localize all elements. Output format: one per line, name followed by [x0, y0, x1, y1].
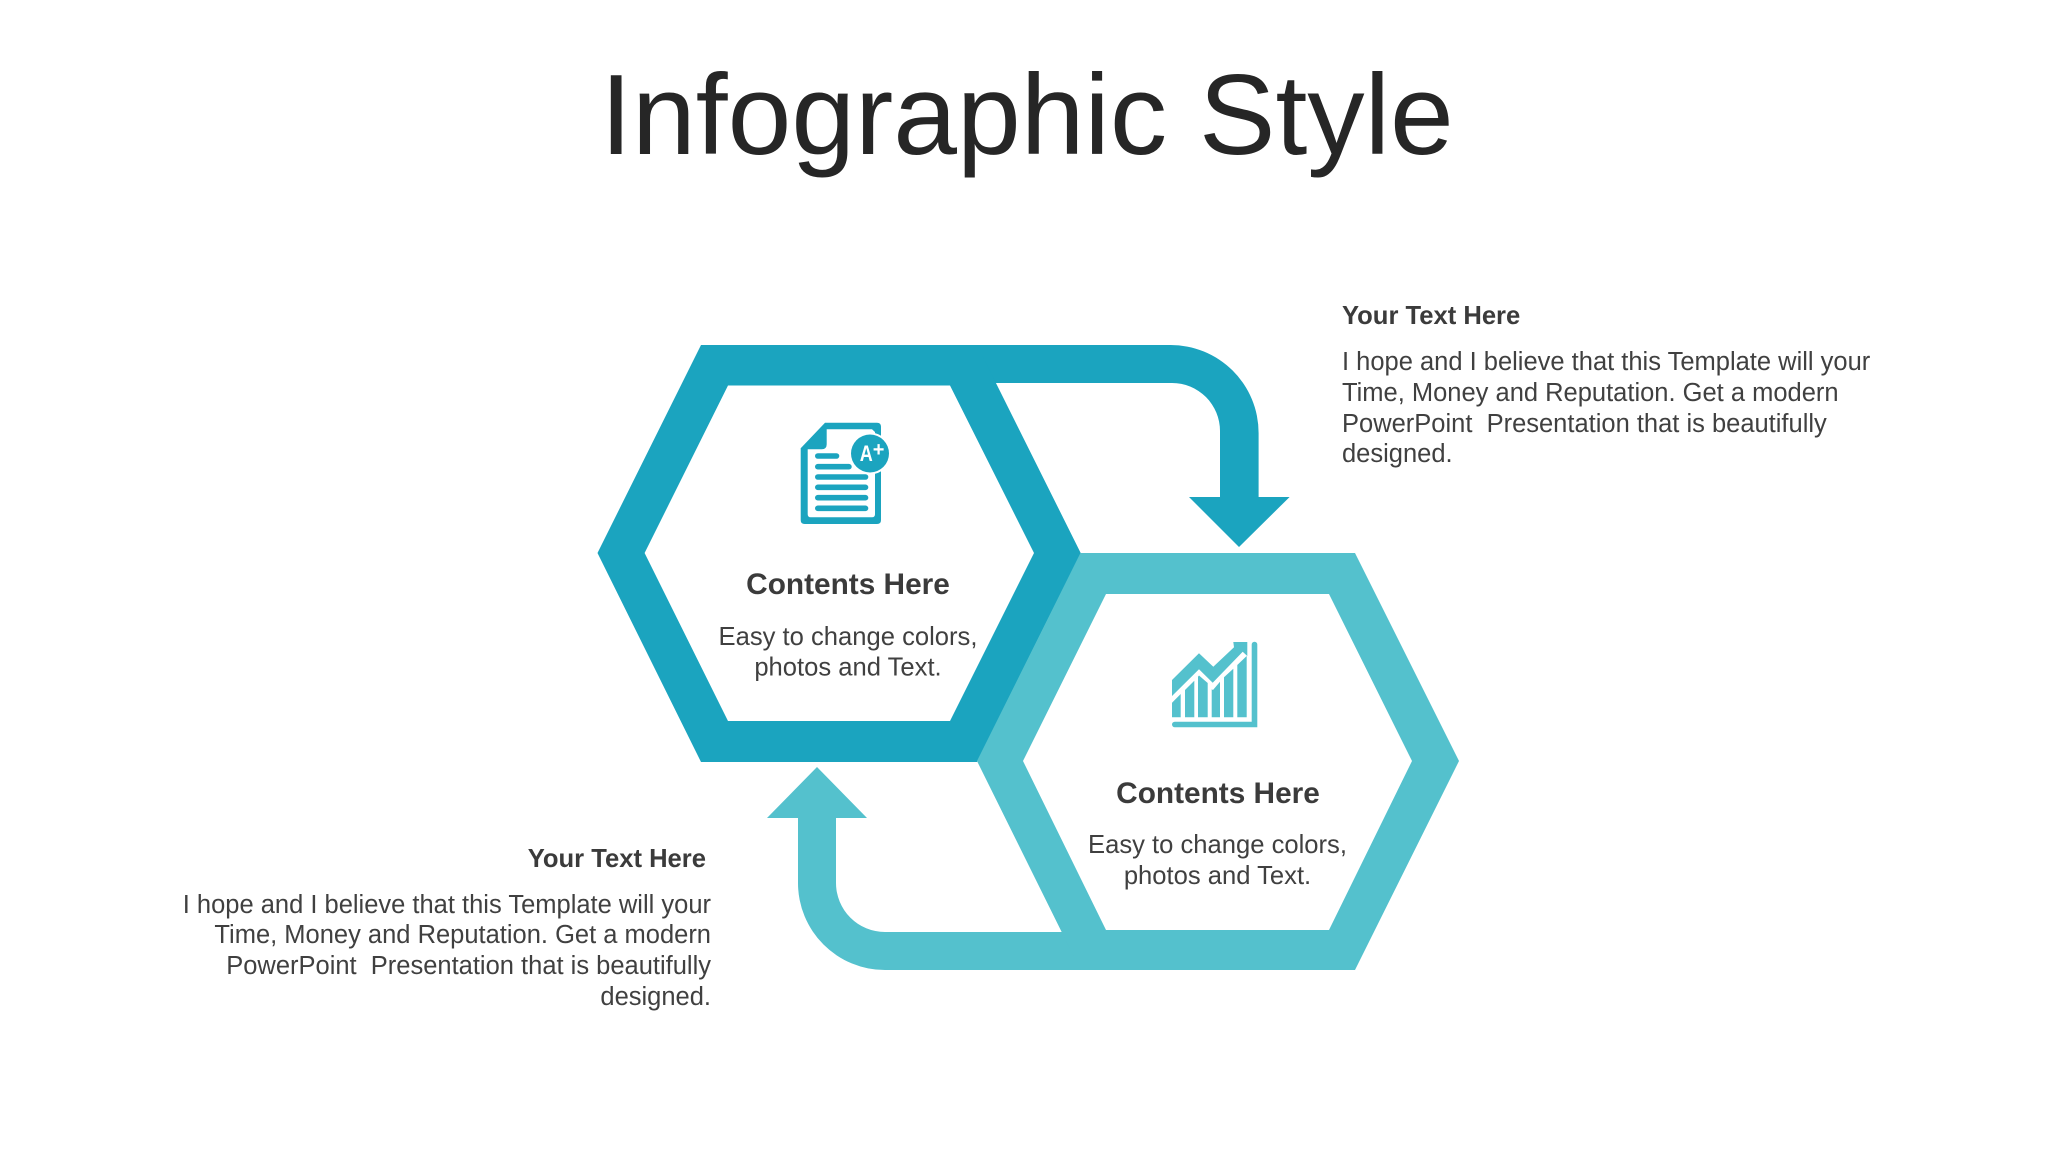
callout: bottom left text: designed.	[600, 983, 711, 1011]
callout: top right text: PowerPoint Presentation that is beautifully	[1342, 410, 1827, 438]
callout: bottom left text	[183, 845, 711, 1011]
cycle diagram	[598, 345, 1459, 970]
callout: bottom left text: Your Text Here	[528, 845, 706, 873]
text: second hexagon contents: Contents Here	[1116, 777, 1320, 810]
callout: top right text: I hope and I believe that this Template will your	[1342, 348, 1871, 376]
text: first hexagon contents: photos and Text.	[754, 654, 942, 682]
icon: rising bar chart	[1172, 642, 1257, 727]
icon: document with A+ badge: A	[860, 441, 873, 466]
callout: top right text	[1342, 302, 1871, 468]
arrow: light bottom arrow to first hexagon	[767, 767, 1090, 970]
arrow: dark top arrow to second hexagon	[960, 345, 1290, 547]
text: first hexagon contents: Easy to change colors,	[719, 623, 977, 651]
title: Infographic Style	[600, 51, 1454, 179]
text: second hexagon contents: Easy to change colors,	[1088, 831, 1347, 859]
icon: document with A+ badge: +	[873, 439, 884, 461]
callout: bottom left text: Time, Money and Reputation. Get a modern	[214, 921, 711, 949]
text: first hexagon contents	[719, 568, 977, 682]
icon: document with A+ badge	[801, 423, 891, 524]
text: second hexagon contents	[1088, 777, 1347, 890]
callout: top right text: designed.	[1342, 440, 1453, 468]
callout: bottom left text: PowerPoint Presentation that is beautifully	[226, 952, 711, 980]
hexagon: dark frame	[598, 345, 1081, 762]
text: first hexagon contents: Contents Here	[746, 568, 950, 601]
callout: top right text: Time, Money and Reputation. Get a modern	[1342, 379, 1839, 407]
hexagon: light frame	[977, 553, 1459, 970]
text: second hexagon contents: photos and Text.	[1124, 862, 1311, 890]
callout: bottom left text: I hope and I believe that this Template will your	[183, 891, 711, 919]
callout: top right text: Your Text Here	[1342, 302, 1520, 330]
